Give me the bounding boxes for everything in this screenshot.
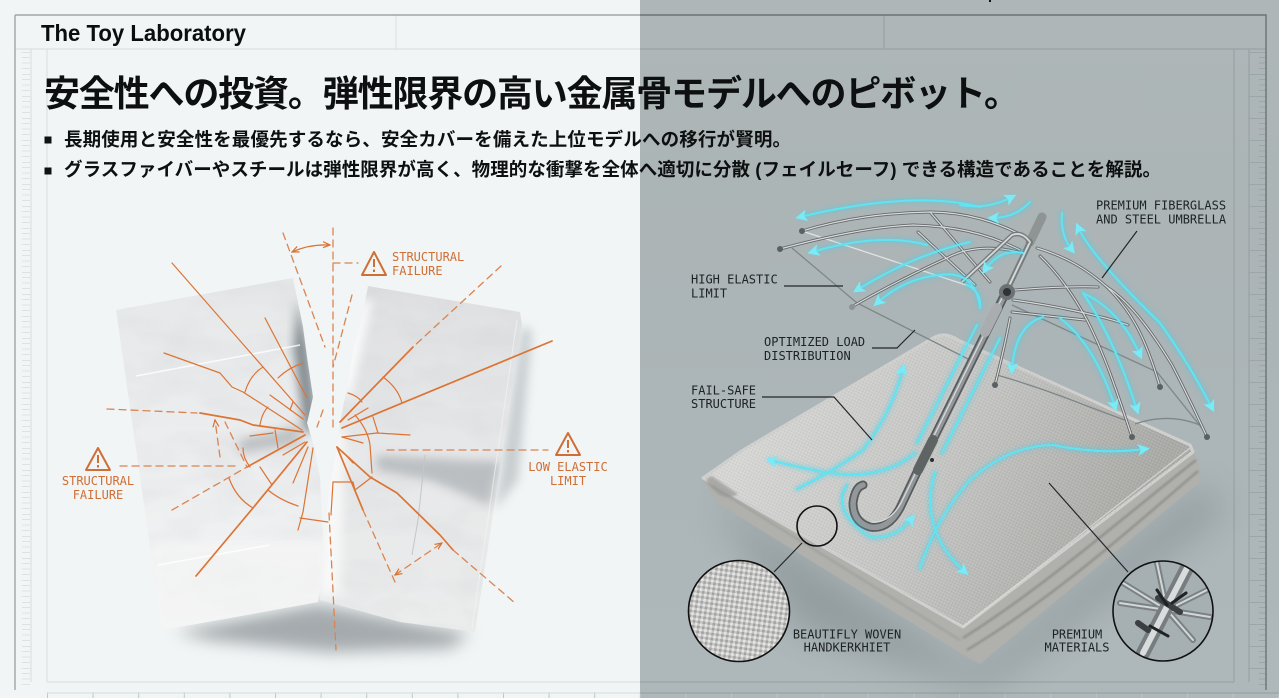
callout: premium fiberglass and steel umbrella: AND STEEL UMBRELLA (1096, 212, 1227, 226)
callout: fail-safe structure: STRUCTURE (691, 397, 756, 411)
umbrella ribs (777, 212, 1210, 440)
callout: premium fiberglass and steel umbrella (1096, 198, 1227, 278)
callout: optimized load distribution: DISTRIBUTION (764, 349, 851, 363)
panel: light left background (0, 0, 640, 698)
folded handkerchief (703, 335, 1200, 662)
callout: high elastic limit: LIMIT (691, 286, 727, 300)
crack lines (107, 228, 552, 650)
warning: structural failure left: FAILURE (73, 488, 123, 502)
panel: folded handkerchief and umbrella (685, 197, 1227, 690)
warning: low elastic limit: LIMIT (550, 474, 586, 488)
bullet list (44, 129, 1161, 180)
warning: structural failure top: FAILURE (392, 264, 443, 278)
tissue shadow (175, 325, 532, 652)
bullet 2: グラスファイバーやスチールは弾性限界が高く、物理的な衝撃を全体へ適切に分散 (フェイルセーフ) できる構造であることを解説。 (64, 159, 1161, 180)
callout: high elastic limit (691, 272, 843, 300)
warning: structural failure top (362, 250, 464, 278)
brand heading: The Toy Laboratory (41, 20, 246, 46)
canopy edge lines (792, 231, 1205, 432)
umbrella shaft and handle (853, 217, 1042, 527)
callout: fail-safe structure (691, 384, 872, 440)
warning: structural failure top: STRUCTURAL (392, 250, 464, 264)
torn tissue left half (116, 278, 322, 627)
callout: premium materials magnifier (1044, 483, 1213, 661)
callout: premium materials magnifier: MATERIALS (1044, 640, 1110, 654)
torn tissue right half (320, 286, 522, 630)
callout: woven handkerchief magnifier (685, 506, 901, 664)
callout: woven handkerchief magnifier: BEAUTIFLY WOVEN (793, 628, 901, 642)
callout: premium materials magnifier: PREMIUM (1052, 628, 1102, 642)
callout: premium fiberglass and steel umbrella: PREMIUM FIBERGLASS (1096, 198, 1226, 212)
warning: low elastic limit: LOW ELASTIC (528, 460, 608, 474)
warning: structural failure left (62, 448, 134, 502)
title: 安全性への投資。弾性限界の高い金属骨モデルへのピボット。 (44, 73, 1020, 114)
panel: grey right background (640, 0, 1279, 698)
warning: low elastic limit (528, 433, 608, 488)
cyan airflow arrows (770, 197, 1212, 572)
panel: torn tissue with failure analysis (62, 228, 608, 652)
bullet 1: 長期使用と安全性を最優先するなら、安全カバーを備えた上位モデルへの移行が賢明。 (64, 129, 791, 150)
handkerchief shadow (710, 485, 1225, 690)
callout: high elastic limit: HIGH ELASTIC (691, 272, 778, 286)
callout: optimized load distribution (764, 330, 915, 363)
callout: woven handkerchief magnifier: HANDKERKHIET (804, 640, 890, 654)
warning: structural failure left: STRUCTURAL (62, 474, 134, 488)
callout: optimized load distribution: OPTIMIZED LOAD (764, 335, 865, 349)
callout: fail-safe structure: FAIL-SAFE (691, 384, 756, 398)
